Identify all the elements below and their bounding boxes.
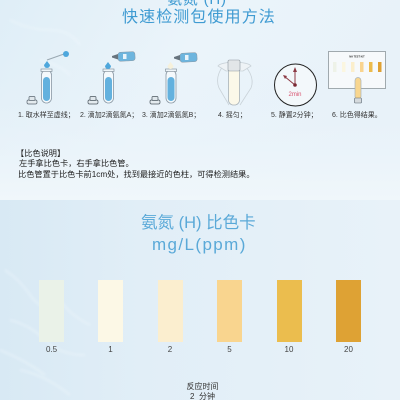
title xyxy=(122,0,276,26)
reaction time note: 反应时间 xyxy=(186,382,218,391)
step captions: 2. 滴加2滴氨氮A； xyxy=(80,112,138,119)
step captions: 5. 静置2分钟； xyxy=(271,112,318,119)
color comparison instructions: 【比色说明】 xyxy=(16,149,65,158)
color comparison instructions xyxy=(16,149,255,178)
color chart bars: 2 xyxy=(168,345,172,354)
color chart heading: mg/L(ppm) xyxy=(152,235,247,254)
color chart heading xyxy=(141,214,256,254)
title: 快速检测包使用方法 xyxy=(122,9,276,26)
color chart bars: 20 xyxy=(344,345,353,354)
step illustrations xyxy=(26,51,386,106)
icon: step 3 tube and bottle xyxy=(150,53,197,104)
icon: step 6 color comparison card xyxy=(328,52,386,103)
color chart bars: 0.5 xyxy=(46,345,57,354)
color chart bars: 10 xyxy=(285,345,293,354)
icon: step 4 shaking tube xyxy=(218,60,252,105)
icon: step 6 color comparison card: NH TEST KIT xyxy=(349,56,365,58)
color chart bars: 1 xyxy=(108,345,113,354)
step captions: 1. 取水样至虚线； xyxy=(18,112,75,119)
color comparison instructions: 比色管置于比色卡前1cm处，找到最接近的色柱，可得检测结果。 xyxy=(18,170,255,178)
color chart heading: 氨氮 (H) 比色卡 xyxy=(141,214,256,232)
icon: step 2 tube and bottle xyxy=(88,52,135,104)
color comparison instructions: 左手拿比色卡，右手拿比色管。 xyxy=(19,159,134,168)
icon: step 5 timer clock: 2min xyxy=(288,92,302,98)
step captions: 4. 摇匀； xyxy=(218,112,247,119)
step captions xyxy=(18,111,382,119)
reaction time note xyxy=(186,382,218,400)
icon: step 5 timer clock xyxy=(274,64,316,106)
icon: step 1 tube and dropper xyxy=(27,51,69,104)
step captions: 6. 比色得结果。 xyxy=(332,112,382,119)
step captions: 3. 滴加2滴氨氮B； xyxy=(142,112,200,119)
color chart bars xyxy=(39,280,361,354)
color chart bars: 5 xyxy=(227,345,232,354)
